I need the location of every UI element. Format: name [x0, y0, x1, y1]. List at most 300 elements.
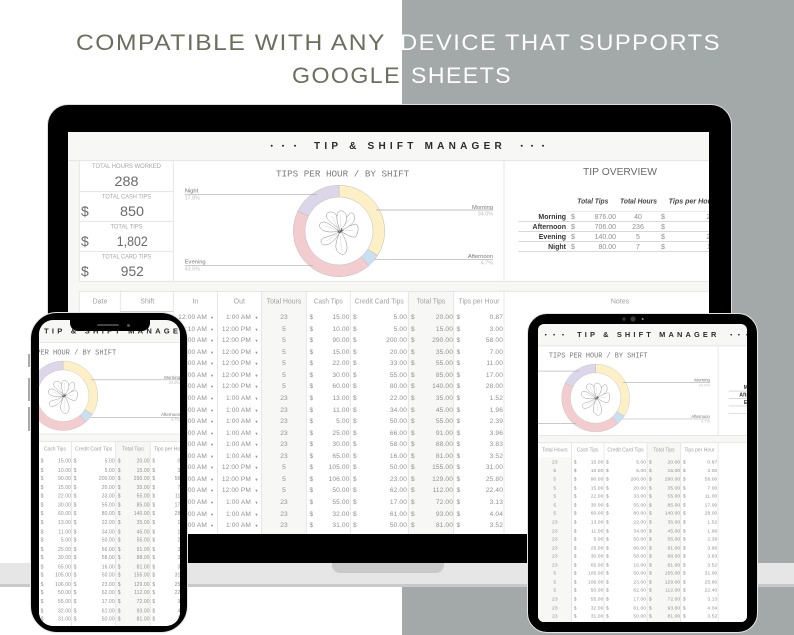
table column: in: 2:00 AM — [182, 441, 207, 448]
table column: total tips: 112.00 — [134, 591, 150, 596]
table column: in: 12:00 AM — [178, 314, 207, 321]
table column: cash tips: $ — [574, 614, 577, 619]
table column: credit card tips: 58.00 — [634, 554, 646, 559]
table column: total tips: $ — [411, 441, 415, 448]
table column: total tips: 20.00 — [436, 314, 453, 321]
table column: cash tips: 10.00 — [58, 468, 71, 473]
table column: total tips: 155.00 — [134, 573, 150, 578]
table column: credit card tips: $ — [606, 571, 609, 576]
table column: total hours: 5 — [282, 383, 286, 390]
table column: credit card tips: 17.00 — [390, 499, 407, 506]
table column: total hours: 5 — [282, 487, 286, 494]
table column: cash tips: 25.00 — [332, 430, 350, 437]
table column: total tips: $ — [411, 464, 415, 471]
table column: total tips: $ — [411, 372, 415, 379]
table column: total tips: 93.00 — [137, 608, 150, 614]
table column: cash tips: $ — [574, 571, 577, 576]
table column: total tips: 81.00 — [137, 617, 150, 622]
table column: credit card tips: $ — [606, 468, 609, 473]
table column: total tips: $ — [411, 326, 415, 333]
table column: tips per hour: $ — [683, 597, 686, 602]
tip overview table: $ — [661, 234, 665, 241]
table header: Cash Tips — [577, 448, 599, 454]
table column: cash tips: 25.00 — [58, 547, 71, 552]
table column: credit card tips: $ — [74, 512, 77, 517]
table column: in dropdown arrows: ▼ — [210, 408, 214, 412]
table column: total tips: $ — [649, 460, 652, 465]
table column: total hours: 23 — [280, 314, 288, 321]
table column: total tips: $ — [411, 383, 415, 390]
table column: credit card tips: 23.00 — [634, 580, 646, 585]
table column: total tips: $ — [649, 520, 652, 525]
table column: credit card tips: $ — [74, 547, 77, 552]
table column: total tips: 35.00 — [436, 349, 453, 356]
table column: tips per hour: 17.00 — [705, 502, 718, 508]
table column: cash tips: 32.00 — [58, 608, 71, 614]
table column: tips per hour: $ — [683, 605, 686, 611]
table column: tips per hour: 1.96 — [708, 528, 718, 533]
kpi: total card tips — [81, 254, 151, 279]
table column: out: 12:00 PM — [222, 464, 251, 471]
table column: credit card tips: 80.00 — [634, 511, 646, 516]
table column: tips per hour: $ — [683, 485, 686, 491]
table column: cash tips: $ — [574, 597, 577, 602]
table column: in: 7:00 AM — [182, 464, 207, 471]
table column: total hours: 5 — [282, 476, 286, 483]
table column: tips per hour: $ — [456, 337, 460, 344]
table column: cash tips: $ — [310, 372, 313, 379]
table column: in: 7:00 AM — [182, 372, 207, 379]
table column: tips per hour: 22.40 — [705, 588, 718, 593]
table column: credit card tips: $ — [353, 476, 357, 483]
table column: out dropdown arrows — [254, 315, 259, 528]
table column: credit card tips: $ — [353, 441, 357, 448]
title: DEVICE THAT SUPPORTS — [400, 30, 721, 55]
table column: in dropdown arrows: ▼ — [210, 488, 214, 493]
table header: Out — [234, 298, 245, 305]
table column: tips per hour: $ — [152, 573, 155, 578]
table column: out dropdown arrows: ▼ — [254, 488, 259, 493]
table column: cash tips: $ — [41, 608, 44, 614]
kpi: total tips: $ — [81, 233, 89, 249]
table column: cash tips: 31.00 — [58, 617, 71, 622]
table column: tips per hour: $ — [456, 372, 460, 379]
table column: tips per hour: 2.39 — [490, 418, 503, 425]
table column: in: 2:00 AM — [182, 418, 207, 425]
table column: credit card tips: 50.00 — [390, 522, 407, 529]
table column: out: 1:00 AM — [226, 511, 251, 518]
sheet title: TIP & SHIFT MANAGER — [577, 330, 717, 339]
table column: total tips: 290.00 — [134, 476, 150, 482]
table column: in: 7:00 AM — [182, 349, 207, 356]
table column: total tips: 15.00 — [668, 468, 681, 473]
table column: credit card tips: $ — [353, 430, 357, 437]
table column: cash tips: $ — [574, 545, 577, 551]
table column: total hours — [552, 460, 558, 619]
table column: credit card tips: $ — [606, 494, 609, 499]
tip overview table: 236 — [632, 224, 644, 231]
table column: credit card tips: 16.00 — [102, 564, 115, 570]
table column: cash tips: 22.00 — [591, 494, 604, 499]
callout: morning — [91, 375, 181, 385]
tip overview table: $ — [571, 244, 575, 251]
table column: cash tips: 90.00 — [332, 337, 350, 344]
callout: evening: Evening — [185, 260, 206, 266]
table column: total tips: 85.00 — [436, 372, 453, 379]
table column: total tips: 129.00 — [432, 476, 453, 483]
table column: out dropdown arrows: ▼ — [254, 396, 259, 401]
table column: cash tips: $ — [310, 395, 313, 402]
table column: credit card tips: 50.00 — [102, 538, 115, 543]
table column: credit card tips: 66.00 — [634, 545, 646, 551]
table header: Cash Tips — [314, 298, 343, 305]
callout: afternoon — [90, 412, 181, 422]
table column: tips per hour: $ — [152, 512, 155, 517]
table column: total tips: $ — [118, 582, 121, 587]
table column: total tips: $ — [649, 554, 652, 559]
table column: total tips: 129.00 — [134, 582, 150, 587]
tablet screen: sheet view — [538, 324, 747, 622]
table column: total tips: $ — [118, 564, 121, 570]
table column: credit card tips: $ — [606, 563, 609, 568]
tip overview table: TIP OVERVIEW — [583, 166, 657, 178]
table column: out: 1:00 AM — [226, 441, 251, 448]
table column: cash tips: $ — [574, 580, 577, 585]
table column: tips per hour: $ — [683, 494, 686, 499]
table column: tips per hour: $ — [456, 441, 460, 448]
callout: morning: 34.0% — [699, 383, 711, 388]
table column: in dropdown arrows: ▼ — [210, 523, 214, 528]
leader line: night — [481, 370, 579, 372]
table column: cash tips: $ — [310, 476, 313, 483]
table column: tips per hour: $ — [456, 418, 460, 425]
table column: total hours: 23 — [280, 430, 288, 437]
table header: Date — [93, 298, 107, 305]
table column: tips per hour: $ — [683, 502, 686, 508]
table column: cash tips: $ — [41, 538, 44, 543]
tip overview table — [518, 166, 724, 252]
table column: total tips: 15.00 — [436, 326, 453, 333]
table column: tips per hour: $ — [456, 464, 460, 471]
table column: cash tips: $ — [41, 617, 44, 622]
table column: total tips: $ — [649, 580, 652, 585]
table column: credit card tips: 33.00 — [390, 360, 407, 367]
table column: out: 1:00 AM — [226, 418, 251, 425]
table column: credit card tips: $ — [353, 487, 357, 494]
table column: out dropdown arrows: ▼ — [254, 454, 259, 459]
table column: cash tips: 105.00 — [588, 571, 604, 576]
table column: cash tips: $ — [41, 494, 44, 499]
table column: total tips: $ — [118, 599, 121, 605]
table column: total hours: 23 — [552, 460, 558, 465]
table column: tips per hour: 58.00 — [486, 337, 503, 344]
table column: tips per hour: $ — [683, 563, 686, 568]
table header — [44, 447, 185, 453]
tip overview table: $ — [661, 244, 665, 251]
table column: in dropdown arrows — [210, 315, 214, 528]
phone notch — [70, 320, 150, 331]
table column: cash tips: $ — [310, 314, 313, 321]
table column: cash tips: $ — [41, 582, 44, 587]
table column: total tips: 20.00 — [668, 460, 681, 465]
table column: cash tips: 106.00 — [588, 580, 604, 585]
table column: tips per hour: 17.00 — [486, 372, 503, 379]
table column: cash tips: $ — [310, 511, 313, 518]
table column: credit card tips: 5.00 — [394, 326, 407, 333]
table column: total tips: 55.00 — [436, 418, 453, 425]
kpi: total card tips: TOTAL CARD TIPS — [102, 254, 151, 260]
table header — [93, 298, 630, 305]
kpi: total cash tips: TOTAL CASH TIPS — [102, 194, 151, 200]
table column: tips per hour: $ — [683, 460, 686, 465]
tip overview table: $ — [571, 234, 575, 241]
table column: tips per hour: 25.80 — [705, 580, 718, 585]
table column: cash tips: $ — [41, 573, 44, 578]
table column: total tips: 81.00 — [668, 563, 681, 568]
table column: credit card tips: 16.00 — [634, 563, 646, 568]
table column: in: 2:00 AM — [182, 395, 207, 402]
table column: cash tips: 15.00 — [58, 485, 71, 491]
table header: Total Tips — [654, 448, 675, 454]
table column: out dropdown arrows: ▼ — [254, 477, 259, 482]
table column: tips per hour: 3.96 — [708, 545, 718, 551]
table column: cash tips: $ — [41, 564, 44, 570]
table column: credit card tips: $ — [606, 520, 609, 525]
table column: cash tips: 60.00 — [58, 512, 71, 517]
table column: cash tips: 105.00 — [55, 573, 71, 578]
table column: total tips: $ — [118, 617, 121, 622]
table column: total tips: $ — [118, 494, 121, 499]
table column: credit card tips: 62.00 — [390, 487, 407, 494]
table column: credit card tips — [353, 314, 407, 529]
table column: tips per hour: $ — [683, 537, 686, 542]
table header: Credit Card Tips — [355, 298, 404, 305]
table column: tips per hour: 3.52 — [708, 614, 718, 619]
table column: in dropdown arrows: ▼ — [210, 361, 214, 366]
table column: total tips: $ — [649, 494, 652, 499]
table column: credit card tips: $ — [353, 499, 357, 506]
table column: cash tips: $ — [310, 453, 313, 460]
table column: credit card tips: 5.00 — [637, 460, 646, 465]
table column: credit card tips: $ — [353, 406, 357, 414]
table column: cash tips: 13.00 — [332, 395, 350, 402]
table column: credit card tips: 62.00 — [102, 591, 115, 596]
table column: tips per hour: 31.00 — [486, 464, 503, 471]
table column: tips per hour: 28.00 — [486, 383, 503, 390]
table column: credit card tips: 50.00 — [390, 418, 407, 425]
table column: tips per hour: $ — [456, 511, 460, 518]
table column: in: 2:00 AM — [182, 511, 207, 518]
table column: cash tips: $ — [574, 537, 577, 542]
table column: total hours: 23 — [280, 406, 288, 414]
table column: credit card tips: 5.00 — [105, 468, 115, 473]
table column: total tips: 81.00 — [668, 614, 681, 619]
table column: total tips: 72.00 — [668, 597, 681, 602]
table column: total tips: 140.00 — [665, 511, 681, 516]
table column: tips per hour: 3.13 — [708, 597, 718, 602]
table column: tips per hour: $ — [683, 588, 686, 593]
table column: credit card tips: 17.00 — [634, 597, 646, 602]
table column: tips per hour: $ — [456, 360, 460, 367]
table column: tips per hour: 58.00 — [705, 477, 718, 482]
table column: total tips: $ — [649, 511, 652, 516]
table column: credit card tips: 200.00 — [631, 477, 646, 482]
table column: tips per hour: $ — [683, 580, 686, 585]
table column: credit card tips: $ — [353, 372, 357, 379]
table column: total hours: 5 — [282, 326, 286, 333]
table column: tips per hour: 1.52 — [490, 395, 503, 402]
table column: out: 12:00 PM — [222, 383, 251, 390]
table column: total tips: $ — [649, 468, 652, 473]
table column: credit card tips: 62.00 — [634, 588, 646, 593]
table column: tips per hour: $ — [683, 468, 686, 473]
callout: morning: 34.0% — [168, 380, 180, 385]
table column: total hours: 5 — [282, 349, 286, 356]
donut chart: tips per hour by shift — [293, 185, 385, 277]
table column: total hours: 5 — [554, 485, 557, 491]
table column: in: 7:00 AM — [182, 383, 207, 390]
tip overview table: Total Tips — [577, 198, 608, 206]
table column: credit card tips: 20.00 — [390, 349, 407, 356]
table column: credit card tips: $ — [74, 617, 77, 622]
tip overview table: 876.00 — [595, 214, 616, 221]
table column: cash tips: $ — [41, 468, 44, 473]
table column: total tips: 55.00 — [137, 538, 150, 543]
table header: Credit Card Tips — [608, 448, 644, 454]
table column: total tips: $ — [411, 430, 415, 437]
table column: total tips: 81.00 — [436, 522, 453, 529]
table column: total hours: 5 — [554, 468, 557, 473]
table column: credit card tips: $ — [353, 349, 357, 356]
kpi: total cash tips: $ — [81, 203, 89, 219]
table column: in: 7:00 AM — [182, 487, 207, 494]
table column: credit card tips: 58.00 — [102, 556, 115, 561]
table column: out: 12:00 PM — [222, 360, 251, 367]
table column: total tips: $ — [118, 556, 121, 561]
table column: total tips: $ — [411, 511, 415, 518]
table column: credit card tips: 23.00 — [102, 582, 115, 587]
table column: tips per hour — [152, 458, 180, 622]
table column: total tips: $ — [118, 529, 121, 534]
callout: afternoon — [623, 414, 711, 424]
title: COMPATIBLE WITH ANY — [76, 30, 386, 55]
phone — [30, 312, 188, 633]
table column: tips per hour: $ — [152, 529, 155, 534]
table column: total hours: 5 — [554, 494, 557, 499]
table column: total tips: $ — [411, 406, 415, 414]
table column: credit card tips: $ — [74, 476, 77, 482]
table column: in dropdown arrows: ▼ — [210, 338, 214, 343]
table column: total tips: $ — [118, 608, 121, 614]
table column: total tips — [649, 460, 681, 619]
table column: tips per hour: $ — [152, 582, 155, 587]
phone camera — [126, 324, 130, 327]
table column: total tips: $ — [411, 499, 415, 506]
kpi: total cash tips — [81, 194, 151, 219]
callout: afternoon: Afternoon — [692, 414, 711, 419]
table column: tips per hour: 3.13 — [490, 499, 503, 506]
table column: total tips: $ — [649, 571, 652, 576]
kpi: total hours worked: 288 — [114, 173, 139, 189]
table column: cash tips: $ — [574, 605, 577, 611]
tablet — [527, 312, 758, 633]
table column: total tips: $ — [411, 476, 415, 483]
table column: credit card tips: 22.00 — [102, 520, 115, 526]
table column: total tips: 112.00 — [433, 487, 453, 494]
table column: total tips: $ — [411, 360, 415, 367]
table column: out: 1:00 AM — [226, 406, 251, 414]
table column: cash tips: 10.00 — [332, 326, 350, 333]
table column: total tips: $ — [118, 459, 121, 464]
table column: credit card tips: 22.00 — [634, 520, 646, 525]
table column: cash tips: 60.00 — [332, 383, 350, 390]
table column: credit card tips: 20.00 — [102, 485, 115, 491]
table column: cash tips: $ — [310, 441, 313, 448]
table column: total tips: 35.00 — [137, 485, 150, 491]
table column: credit card tips: 55.00 — [102, 503, 115, 508]
table column: tips per hour: 7.00 — [490, 349, 503, 356]
table column: cash tips: $ — [574, 460, 577, 465]
table header: Tips per Hour — [459, 298, 500, 305]
table column: total tips: 290.00 — [432, 337, 453, 344]
table column: credit card tips: $ — [74, 599, 77, 605]
laptop base — [0, 563, 794, 587]
table column: credit card tips: 50.00 — [634, 571, 646, 576]
table column: total tips: 35.00 — [436, 395, 453, 402]
table column: total tips: 88.00 — [436, 441, 453, 448]
table column: tips per hour: 0.87 — [490, 314, 503, 321]
table column: credit card tips: 55.00 — [634, 502, 646, 508]
table column: tips per hour: $ — [152, 468, 155, 473]
table column: credit card tips: $ — [606, 580, 609, 585]
table column: cash tips — [40, 458, 71, 622]
table column: in dropdown arrows: ▼ — [210, 465, 214, 470]
table column: credit card tips: $ — [606, 605, 609, 611]
table header — [542, 448, 715, 454]
laptop — [47, 104, 732, 563]
table column: cash tips: $ — [41, 476, 44, 482]
table column: credit card tips: $ — [606, 588, 609, 593]
table column: in — [178, 314, 207, 529]
table column: credit card tips: $ — [353, 522, 357, 529]
table column: cash tips: 13.00 — [58, 520, 71, 526]
table column: tips per hour: $ — [683, 511, 686, 516]
tip overview table: $ — [661, 224, 665, 231]
table column: total tips: $ — [118, 538, 121, 543]
table column: credit card tips: 200.00 — [386, 337, 407, 344]
table column: total tips: 35.00 — [668, 485, 681, 491]
table column: cash tips: $ — [41, 591, 44, 596]
table column: cash tips: 25.00 — [591, 545, 604, 551]
table column: total tips: 155.00 — [665, 571, 681, 576]
table column: tips per hour: $ — [683, 571, 686, 576]
table column: total tips: $ — [649, 537, 652, 542]
table column: total tips: 45.00 — [436, 406, 453, 414]
table column: total tips: $ — [649, 545, 652, 551]
chart title: TIPS PER HOUR / BY SHIFT — [549, 353, 648, 361]
table column: cash tips: 32.00 — [591, 605, 604, 611]
table column: tips per hour: $ — [152, 564, 155, 570]
table column: credit card tips — [606, 460, 646, 619]
table column: credit card tips: 5.00 — [105, 459, 115, 464]
table column: credit card tips: 66.00 — [390, 430, 407, 437]
table column: total tips: 55.00 — [137, 494, 150, 499]
table column: total hours — [280, 314, 288, 529]
table column: credit card tips: $ — [606, 528, 609, 533]
table column: cash tips: 105.00 — [329, 464, 350, 471]
table column: out: 12:00 PM — [222, 337, 251, 344]
table column: out: 12:00 PM — [222, 372, 251, 379]
